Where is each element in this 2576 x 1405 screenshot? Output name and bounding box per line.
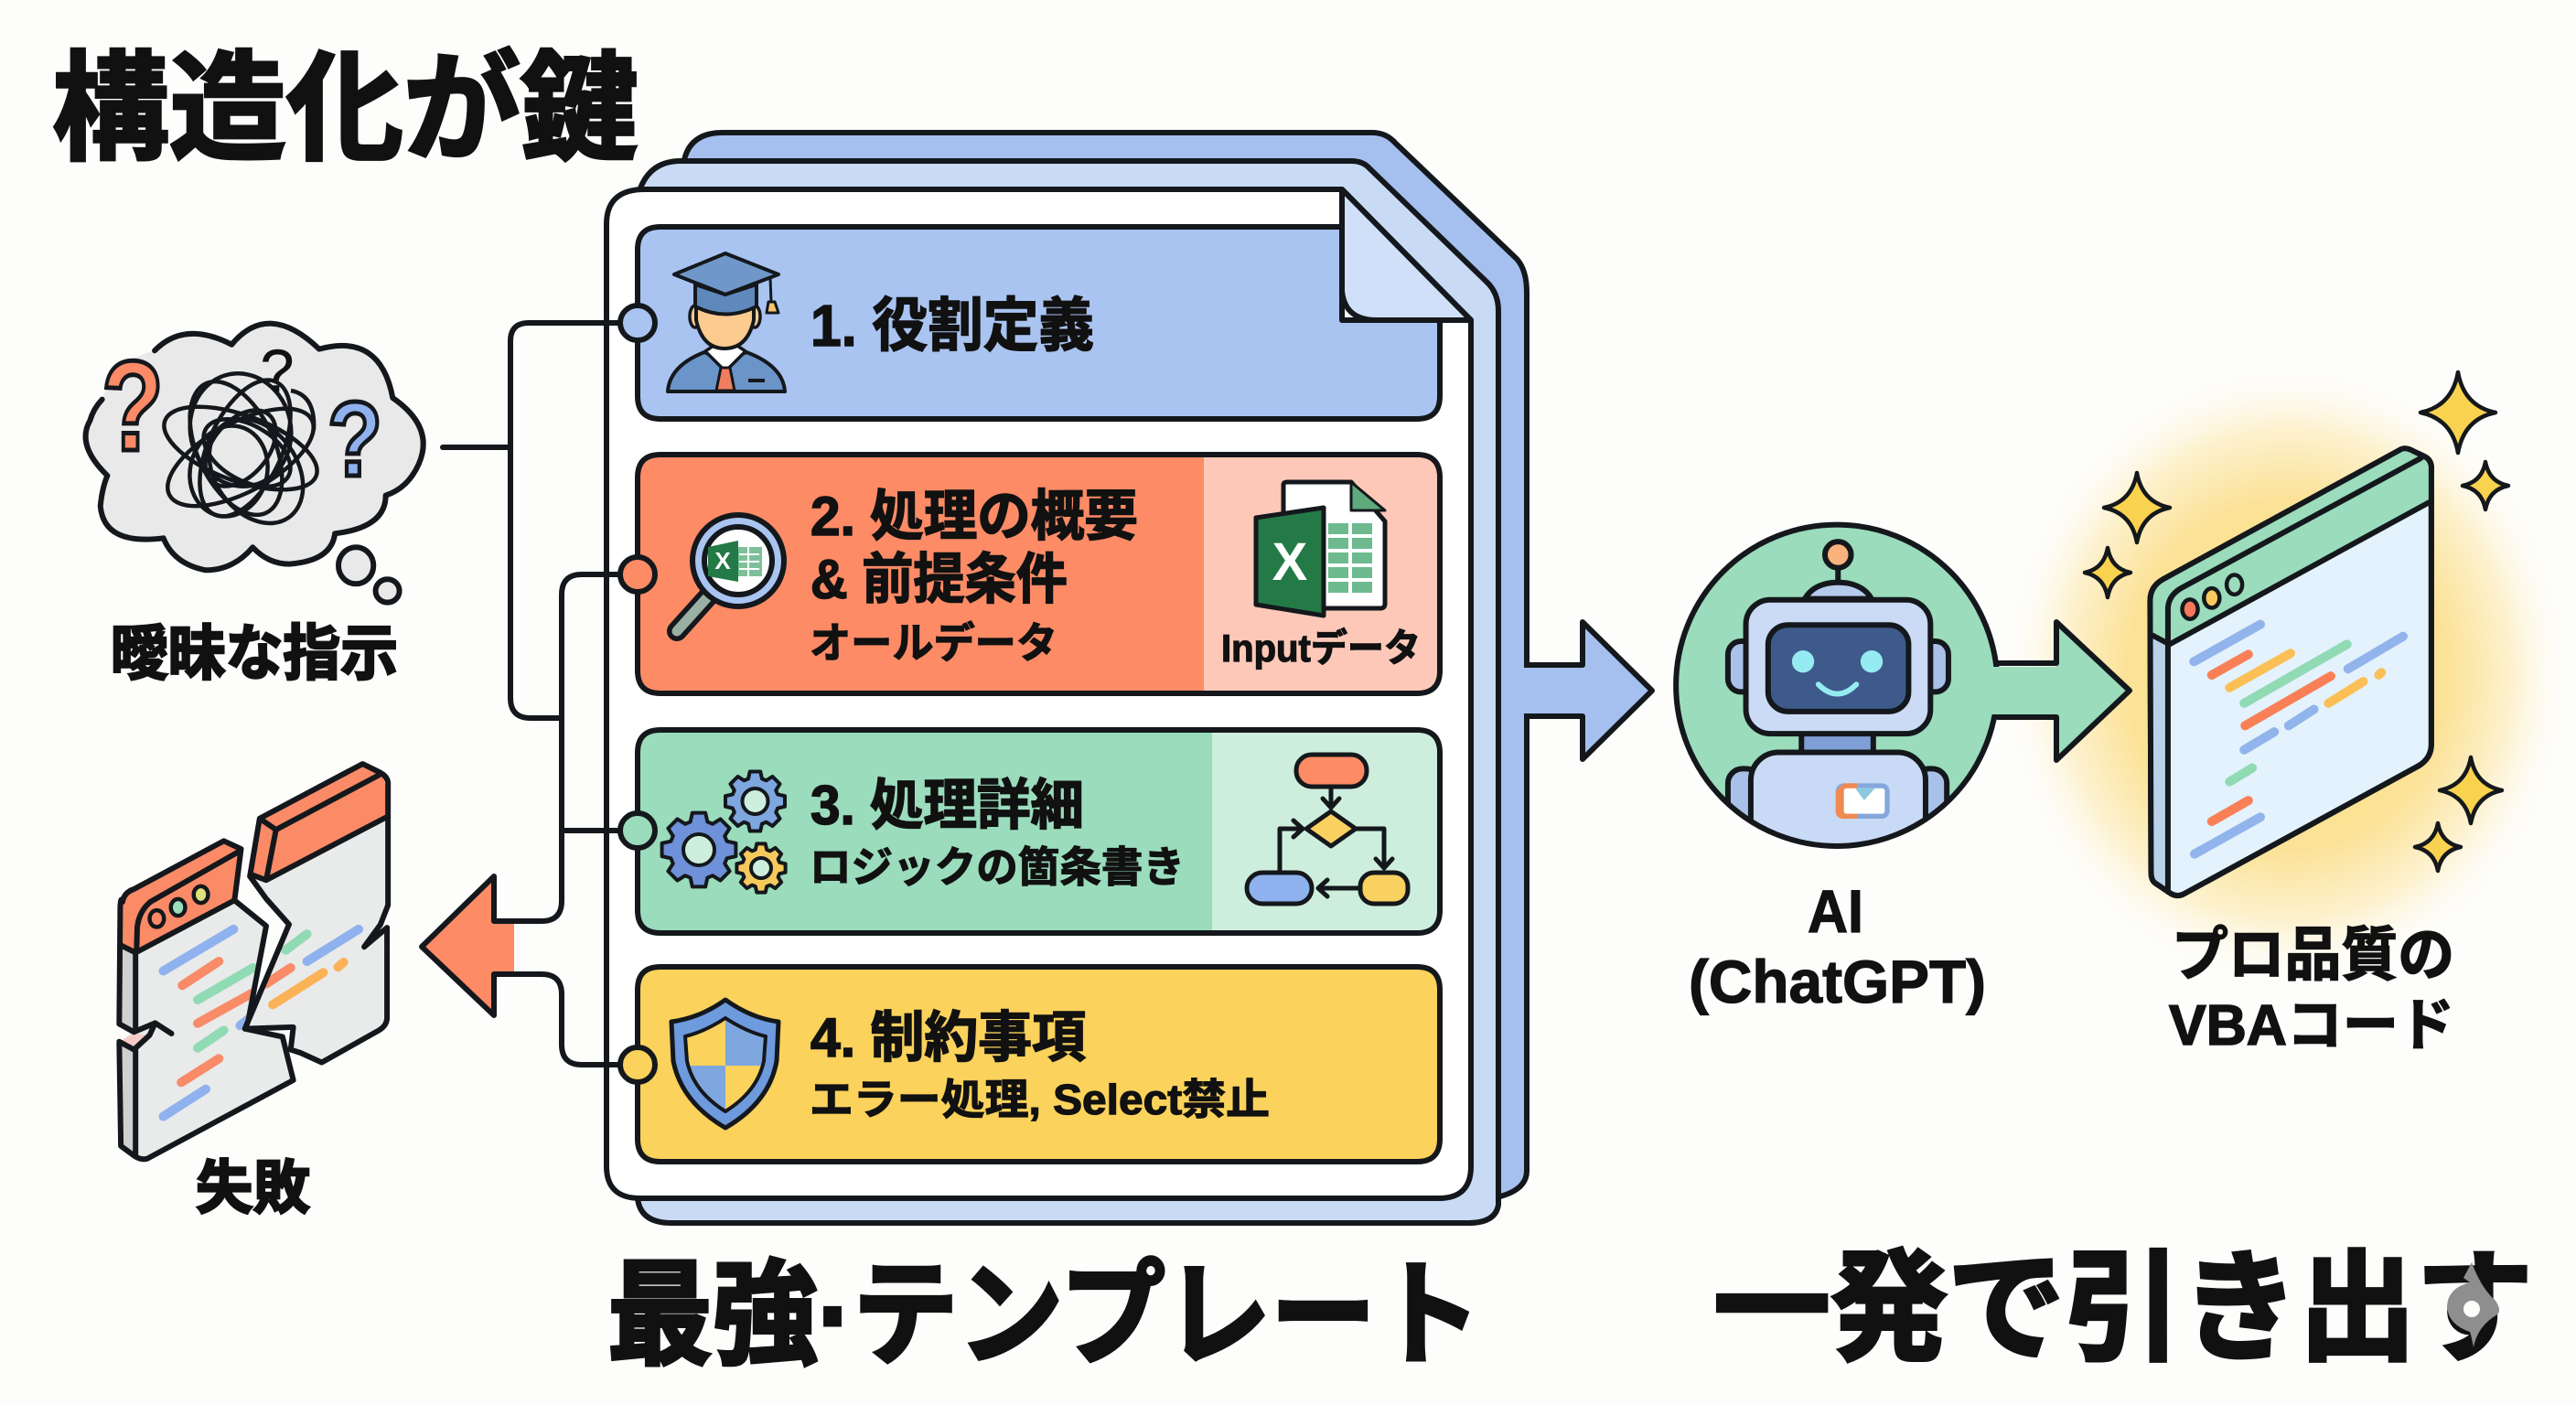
icon: watermark sparkle — [2447, 1262, 2499, 1347]
middle document sheet — [638, 161, 1498, 1223]
panel: AI robot — [1676, 525, 2130, 1015]
icon: orange question mark: ? — [102, 334, 164, 477]
card 2: overview and prerequisites — [620, 455, 1440, 693]
heading: card 4: 4. 制約事項 — [810, 1007, 1086, 1068]
heading: card 2: 2. 処理の概要 — [810, 486, 1138, 547]
title: 構造化が鍵 — [52, 42, 638, 176]
icon: Excel file — [1256, 482, 1385, 616]
arrow: AI to code — [1985, 622, 2130, 760]
footer heading: get it in one shot: 一発で引き出す — [1713, 1241, 2533, 1376]
label: ChatGPT: (ChatGPT) — [1689, 948, 1986, 1015]
panel: failure — [119, 764, 388, 1221]
subtext: all data: オールデータ — [810, 619, 1057, 667]
subtext: logic bullet points: ロジックの箇条書き — [810, 843, 1185, 891]
icon: shield — [671, 1000, 778, 1128]
panel: professional VBA code — [2085, 372, 2508, 1057]
connector lines: cards to cloud and failure — [494, 323, 622, 1065]
template document stack — [606, 133, 1527, 1223]
connector node 2 — [620, 557, 655, 592]
subtext: error handling, no Select: エラー処理, Select禁止 — [810, 1076, 1270, 1123]
icon: tangled scribble — [153, 364, 328, 542]
connector node 4 — [620, 1047, 655, 1082]
card 1: role definition — [620, 227, 1440, 419]
icon: Excel file: X — [1272, 532, 1308, 592]
arrow: to failure — [422, 876, 514, 1015]
icon: magnifier on spreadsheet — [677, 515, 784, 631]
connector node 3 — [620, 813, 655, 848]
label: ambiguous instruction: 曖昧な指示 — [111, 619, 398, 687]
big arrow: template to AI — [1509, 622, 1652, 759]
heading: card 1: 1. 役割定義 — [810, 293, 1094, 359]
icon: magnifier on spreadsheet: X — [714, 547, 731, 574]
icon: gears — [662, 771, 786, 893]
icon: code window — [2150, 448, 2431, 896]
icon: broken code window — [119, 764, 388, 1159]
icon: robot in circle — [1676, 525, 1998, 883]
heading: card 2 second line: & 前提条件 — [810, 549, 1068, 610]
label: AI: AI — [1808, 877, 1863, 945]
glow behind code window — [1999, 359, 2575, 991]
flowchart side panel — [1212, 733, 1437, 930]
back document sheet — [683, 133, 1527, 1196]
heading: card 3: 3. 処理詳細 — [810, 775, 1084, 836]
icon: thought cloud — [86, 324, 424, 603]
input data side panel — [1204, 457, 1437, 691]
connector node 1 — [620, 306, 655, 340]
panel: ambiguous instruction — [86, 324, 424, 687]
icon: small question mark: ? — [261, 337, 294, 404]
page fold corner — [1342, 189, 1471, 320]
card 3: process details — [620, 730, 1440, 933]
label: pro quality: プロ品質の — [2172, 922, 2454, 988]
footer heading: strongest template: 最強·テンプレート — [607, 1252, 1481, 1379]
label: input data: Inputデータ — [1221, 627, 1421, 670]
label: failure: 失敗 — [196, 1155, 310, 1221]
card 4: constraints — [620, 967, 1440, 1162]
icon: flowchart — [1247, 755, 1408, 904]
connector: cloud to template — [443, 445, 510, 450]
sparkles — [2085, 372, 2508, 871]
front document sheet — [606, 189, 1471, 1198]
icon: blue question mark: ? — [327, 380, 382, 499]
label: VBA code: VBAコード — [2169, 994, 2454, 1057]
icon: graduate person — [668, 253, 785, 391]
